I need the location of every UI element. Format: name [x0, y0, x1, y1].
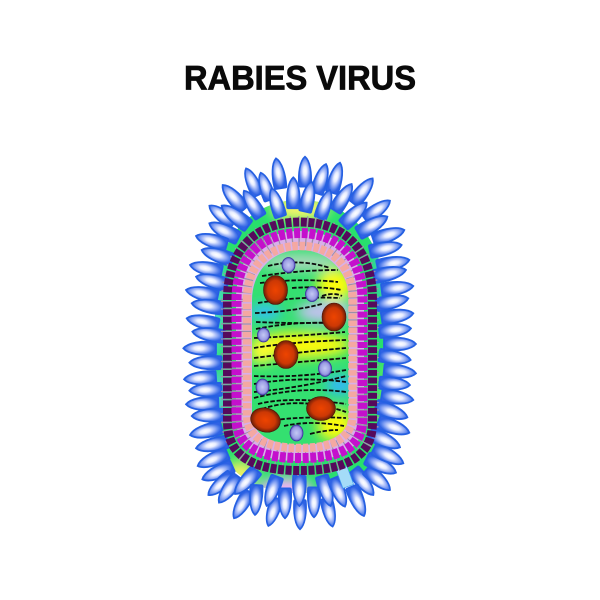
ribonucleoprotein: red bodies — [248, 276, 346, 435]
virus illustration — [183, 157, 417, 529]
membrane stems — [236, 231, 364, 461]
matrix proteins: lavender bodies — [256, 258, 332, 441]
viral envelope — [215, 201, 385, 493]
membrane: magenta ring — [236, 233, 362, 458]
nucleoprotein dashed strands — [254, 262, 346, 434]
spikes: lower half — [183, 337, 417, 529]
inner capsid colour field — [249, 248, 354, 446]
spikes: upper half — [185, 157, 414, 343]
membrane: outer dark ring — [228, 222, 372, 470]
title: RABIES VIRUS — [184, 60, 416, 98]
membrane: pink ring — [247, 246, 352, 448]
